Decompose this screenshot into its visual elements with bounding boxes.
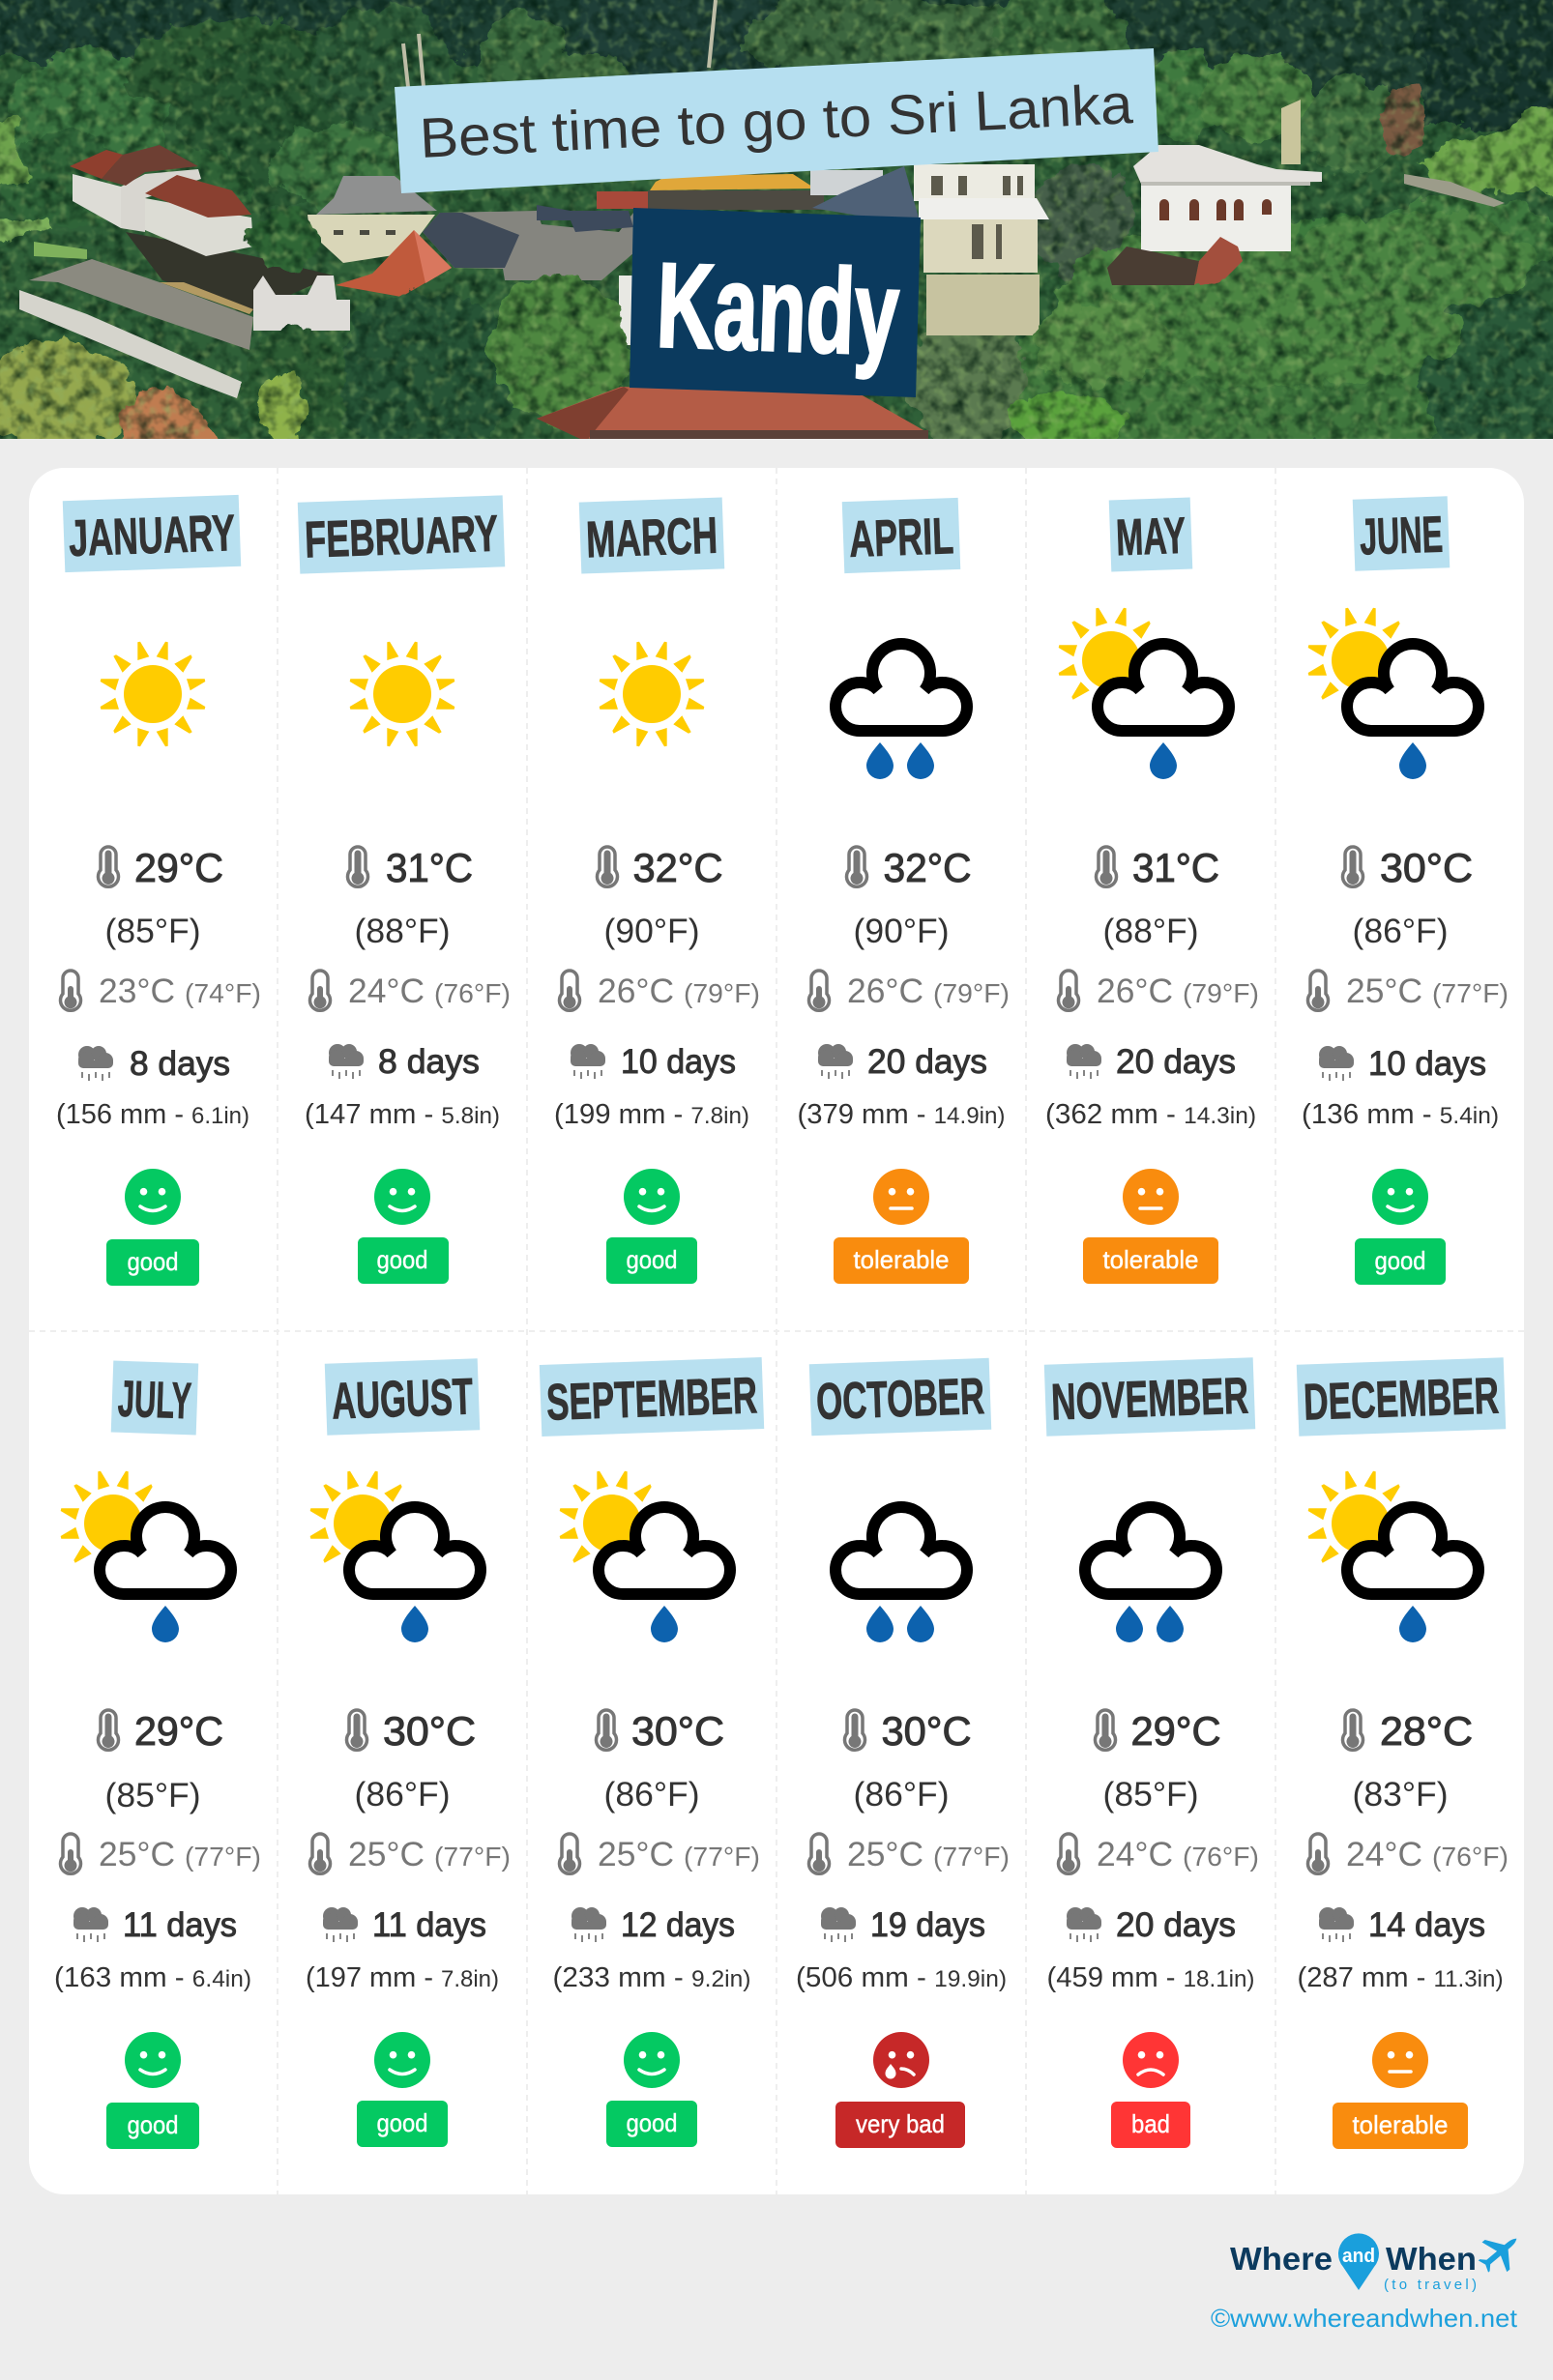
month label: July (111, 1360, 198, 1436)
month label: February (298, 495, 505, 574)
icon: sun (600, 642, 704, 746)
max temperature fahrenheit: (86°F) (355, 1776, 450, 1814)
month label: April (842, 498, 960, 573)
rainfall: (379 mm - 14.9in) (798, 1099, 1005, 1130)
icon: good face (624, 1169, 680, 1225)
badge: good: good (627, 2108, 677, 2137)
rainy days: 8 days (378, 1043, 480, 1081)
max temperature: 30°C (383, 1708, 476, 1754)
max temperature: 32°C (632, 845, 723, 890)
badge: good: good (377, 2108, 427, 2137)
rainy days: 10 days (621, 1043, 736, 1081)
panel: November (1044, 1357, 1259, 2148)
max temperature fahrenheit: (88°F) (355, 913, 450, 950)
badge: tolerable (834, 1237, 969, 1284)
title box: Kandy (630, 208, 921, 397)
rainy days: 19 days (870, 1906, 985, 1944)
rainfall: (199 mm - 7.8in) (554, 1099, 749, 1130)
max temperature: 30°C (882, 1708, 971, 1754)
logo: Where and When to travel: When (1386, 2241, 1477, 2277)
max temperature fahrenheit: (86°F) (854, 1776, 949, 1814)
icon: rain cloud with two drops (1085, 1507, 1216, 1642)
icon: sun (101, 642, 205, 746)
max temperature: 29°C (1131, 1708, 1220, 1754)
min temperature: 25°C (77°F) (1346, 972, 1509, 1010)
rainfall: (287 mm - 11.3in) (1298, 1962, 1503, 1993)
rainy days (1319, 1906, 1485, 1944)
month label: January (63, 495, 241, 572)
month label: November (1044, 1357, 1255, 1437)
month label: October: OCTOBER (815, 1368, 985, 1431)
icon: good face (624, 2032, 680, 2088)
badge: good (357, 2101, 448, 2147)
max temperature fahrenheit: (86°F) (604, 1776, 699, 1814)
rainy days: 12 days (621, 1906, 735, 1944)
max temperature (1342, 1708, 1473, 1754)
max temperature fahrenheit: (85°F) (105, 913, 200, 950)
max temperature: 29°C (134, 1708, 223, 1754)
icon: crying face (873, 2032, 929, 2088)
max temperature fahrenheit: (85°F) (105, 1777, 200, 1814)
rainfall: (156 mm - 6.1in) (56, 1099, 249, 1130)
panel: September (540, 1357, 764, 2147)
rainy days (571, 1043, 736, 1081)
month label: December (1297, 1357, 1506, 1437)
rainy days: 14 days (1368, 1906, 1485, 1944)
badge: tolerable (1083, 1237, 1218, 1284)
rainfall: (163 mm - 6.4in) (54, 1962, 251, 1993)
icon: sun behind rain cloud (61, 1471, 231, 1642)
max temperature: 30°C (1380, 845, 1473, 890)
badge: good (106, 1239, 199, 1286)
min temperature: 24°C (76°F) (1097, 1836, 1259, 1873)
month label: May (1109, 498, 1192, 571)
min temperature: 23°C (74°F) (99, 972, 261, 1010)
icon: rain cloud with two drops (835, 1507, 967, 1642)
badge: good (358, 1237, 449, 1284)
panel: December (1297, 1357, 1509, 2149)
max temperature fahrenheit: (86°F) (1353, 913, 1448, 950)
icon: neutral face (1372, 2032, 1428, 2088)
badge: good: good (128, 2110, 178, 2139)
month label: February: FEBRUARY (304, 506, 499, 568)
rainfall: (506 mm - 19.9in) (796, 1962, 1007, 1993)
panel: white calendar card (29, 468, 1524, 2194)
month label: November: NOVEMBER (1050, 1367, 1249, 1432)
badge: very bad: very bad (856, 2109, 945, 2138)
month label: July: JULY (117, 1371, 192, 1430)
badge: good: good (128, 1247, 178, 1276)
min temperature: 24°C (76°F) (1346, 1836, 1509, 1873)
logo: Where and When to travel: and (1342, 2246, 1375, 2267)
badge: tolerable: tolerable (1352, 2110, 1449, 2139)
panel: July (54, 1360, 261, 2149)
icon: sad face (1123, 2032, 1179, 2088)
icon: sun behind rain cloud (1308, 1471, 1479, 1642)
icon: sun behind rain cloud (560, 1471, 730, 1642)
max temperature fahrenheit: (90°F) (604, 913, 699, 950)
icon: sun (350, 642, 454, 746)
max temperature: 32°C (884, 845, 971, 890)
rainfall: (362 mm - 14.3in) (1045, 1099, 1256, 1130)
badge: very bad (835, 2102, 965, 2148)
rainy days (821, 1906, 985, 1944)
month label: September: SEPTEMBER (545, 1367, 758, 1432)
website credit: ©www.whereandwhen.net (1211, 2304, 1518, 2333)
rainy days: 10 days (1368, 1045, 1486, 1083)
min temperature: 25°C (77°F) (598, 1836, 760, 1873)
month label: June: JUNE (1359, 507, 1444, 566)
header photo: Kandy temple and forest (0, 0, 1553, 439)
rainfall: (233 mm - 9.2in) (553, 1962, 751, 1993)
panel: August (306, 1358, 511, 2147)
icon: sun behind rain cloud (310, 1471, 481, 1642)
badge: good (606, 2101, 697, 2147)
badge: tolerable: tolerable (853, 1245, 950, 1274)
month label: September (540, 1357, 764, 1437)
icon: good face (125, 1169, 181, 1225)
icon: neutral face (1123, 1169, 1179, 1225)
month label: March: MARCH (585, 508, 718, 568)
banner: Best time to go to Sri Lanka: Best time to go to Sri Lanka (418, 73, 1135, 170)
min temperature: 25°C (77°F) (847, 1836, 1010, 1873)
badge: bad (1111, 2102, 1190, 2148)
badge: good (106, 2103, 199, 2149)
badge: good: good (377, 1245, 427, 1274)
rainy days (78, 1045, 230, 1083)
banner: Best time to go to Sri Lanka (395, 48, 1158, 193)
icon: sun behind rain cloud (1308, 608, 1479, 779)
month label: August: AUGUST (331, 1368, 474, 1431)
max temperature: 31°C (1132, 845, 1219, 890)
rainfall: (459 mm - 18.1in) (1047, 1962, 1254, 1993)
min temperature: 26°C (79°F) (1097, 972, 1259, 1010)
month label: January: JANUARY (68, 505, 236, 567)
max temperature fahrenheit: (88°F) (1103, 913, 1198, 950)
rainy days (329, 1043, 480, 1081)
logo: Where and When to travel: (to travel) (1384, 2277, 1477, 2293)
max temperature fahrenheit: (90°F) (854, 913, 949, 950)
rainfall: (197 mm - 7.8in) (306, 1962, 499, 1993)
panel: April (797, 498, 1010, 1284)
rainy days: 20 days (1116, 1043, 1236, 1081)
icon: sun behind rain cloud (1059, 608, 1229, 779)
min temperature: 24°C (76°F) (348, 972, 511, 1010)
icon: neutral face (873, 1169, 929, 1225)
badge: tolerable (1333, 2103, 1468, 2149)
max temperature (1342, 845, 1473, 890)
badge: tolerable: tolerable (1102, 1245, 1199, 1274)
logo: Where and When to travel (1230, 2223, 1529, 2293)
panel: October (796, 1358, 1010, 2148)
min temperature: 26°C (79°F) (598, 972, 760, 1010)
rainy days: 20 days (867, 1043, 987, 1081)
rainy days (571, 1906, 735, 1944)
rainy days (323, 1906, 486, 1944)
rainy days: 20 days (1116, 1906, 1236, 1944)
icon: good face (374, 2032, 430, 2088)
logo: Where and When to travel: Where (1230, 2241, 1333, 2277)
panel: March (554, 497, 760, 1284)
icon: rain cloud with two drops (835, 644, 967, 779)
rainy days: 11 days (123, 1906, 237, 1944)
title box: Kandy: Kandy (655, 239, 901, 381)
max temperature (847, 845, 971, 890)
panel: January (56, 495, 261, 1286)
max temperature: 29°C (134, 845, 223, 890)
month label: October (809, 1358, 991, 1436)
panel: May (1045, 498, 1259, 1284)
min temperature: 26°C (79°F) (847, 972, 1010, 1010)
month label: August (325, 1358, 480, 1436)
panel: February (298, 495, 511, 1284)
rainy days (73, 1906, 237, 1944)
rainfall: (147 mm - 5.8in) (305, 1099, 500, 1130)
rainfall: (136 mm - 5.4in) (1302, 1099, 1499, 1130)
max temperature fahrenheit: (83°F) (1353, 1776, 1448, 1814)
rainy days: 11 days (372, 1906, 486, 1944)
max temperature (348, 845, 473, 890)
badge: good: good (1375, 1246, 1425, 1275)
month label: June (1353, 496, 1450, 571)
min temperature: 25°C (77°F) (99, 1836, 261, 1873)
icon: good face (374, 1169, 430, 1225)
max temperature (1097, 845, 1219, 890)
badge: good: good (627, 1245, 677, 1274)
min temperature: 25°C (77°F) (348, 1836, 511, 1873)
month label: March (579, 497, 724, 574)
badge: bad: bad (1131, 2109, 1170, 2138)
icon: good face (125, 2032, 181, 2088)
badge: good (1355, 1238, 1446, 1285)
max temperature: 30°C (631, 1708, 724, 1754)
panel: June (1302, 496, 1509, 1285)
max temperature: 28°C (1380, 1708, 1473, 1754)
month label: May: MAY (1115, 508, 1187, 566)
max temperature fahrenheit: (85°F) (1103, 1776, 1198, 1814)
icon: good face (1372, 1169, 1428, 1225)
max temperature: 31°C (386, 845, 473, 890)
rainy days: 8 days (130, 1045, 230, 1083)
month label: April: APRIL (848, 508, 954, 568)
badge: good (606, 1237, 697, 1284)
